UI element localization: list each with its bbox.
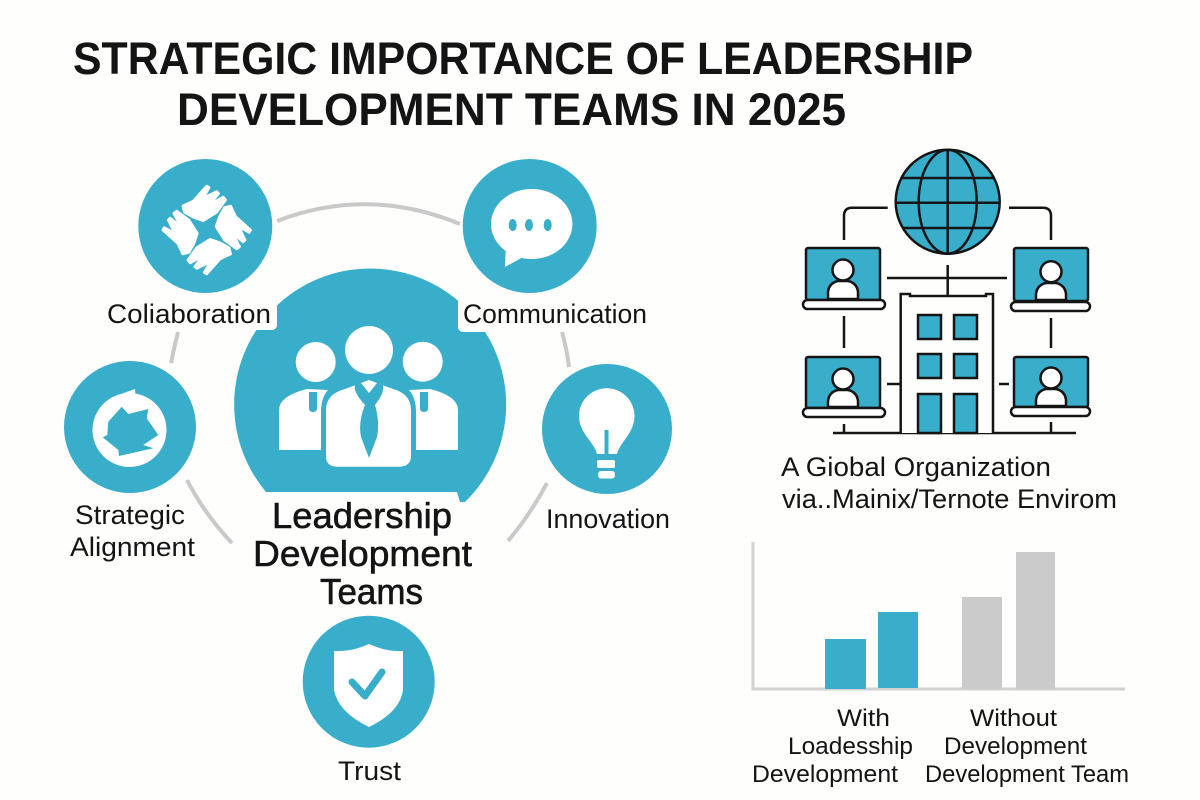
label: trust: Trust: [338, 756, 402, 786]
panel: central leadership hub: [100, 269, 558, 612]
label: without development team: Development: [944, 733, 1087, 760]
label: communication: Communication: [463, 299, 647, 329]
label: without development team: [925, 705, 1129, 788]
text block: global organization caption: [781, 452, 1117, 514]
icon: laptop bottom left: [803, 357, 885, 417]
panel: collaboration: [107, 159, 272, 329]
icon: office building: [901, 294, 993, 433]
icon: light bulb: [579, 388, 634, 478]
label: collaboration: Coliaboration: [107, 299, 271, 329]
label cutout right: [458, 296, 558, 332]
network connector lines: [833, 208, 1076, 433]
panel: global organization network: [803, 150, 1090, 433]
title: [73, 33, 973, 135]
icon: circular arrows around target: [92, 389, 166, 467]
text block: global organization caption: A Giobal Organization: [781, 452, 1051, 482]
panel: innovation: [542, 364, 672, 534]
label: without development team: Development Team: [925, 761, 1129, 788]
connecting arcs between hub topics: [171, 204, 569, 543]
title: DEVELOPMENT TEAMS IN 2025: [177, 84, 846, 135]
bars: with leadership development: [825, 612, 918, 689]
label: with leadership development: Development: [752, 761, 898, 788]
label: with leadership development: With: [837, 705, 890, 732]
text block: global organization caption: via..Mainix/Ternote Envirom: [782, 484, 1117, 514]
label: strategic alignment: Alignment: [70, 532, 196, 562]
hub circle: [234, 269, 506, 502]
chart axes: [753, 542, 1125, 689]
hub label: Teams: [320, 571, 423, 612]
hub label: Leadership: [272, 495, 452, 536]
label: with leadership development: [752, 705, 913, 788]
icon: leadership team: [279, 326, 458, 467]
label: with leadership development: Loadesship: [788, 733, 913, 760]
hub label: Development: [253, 533, 472, 574]
icon: laptop top left: [803, 248, 885, 309]
icon: speech bubble: [491, 189, 572, 267]
bars: without development team: [962, 552, 1055, 689]
label: without development team: Without: [970, 705, 1057, 732]
icon: four joined hands: [163, 186, 251, 274]
label: strategic alignment: [70, 500, 196, 562]
label: innovation: Innovation: [546, 504, 670, 534]
label cutout left: [100, 300, 277, 330]
icon: globe: [896, 150, 1000, 254]
hub label: [253, 495, 472, 612]
label: strategic alignment: Strategic: [75, 500, 185, 530]
icon: shield with check mark: [334, 644, 403, 727]
panel: communication: [463, 159, 647, 329]
title: STRATEGIC IMPORTANCE OF LEADERSHIP: [73, 33, 973, 84]
bar chart: [752, 542, 1129, 788]
panel: strategic alignment: [64, 361, 196, 562]
icon: laptop bottom right: [1011, 357, 1090, 416]
panel: trust: [303, 616, 435, 786]
icon: laptop top right: [1011, 248, 1090, 311]
